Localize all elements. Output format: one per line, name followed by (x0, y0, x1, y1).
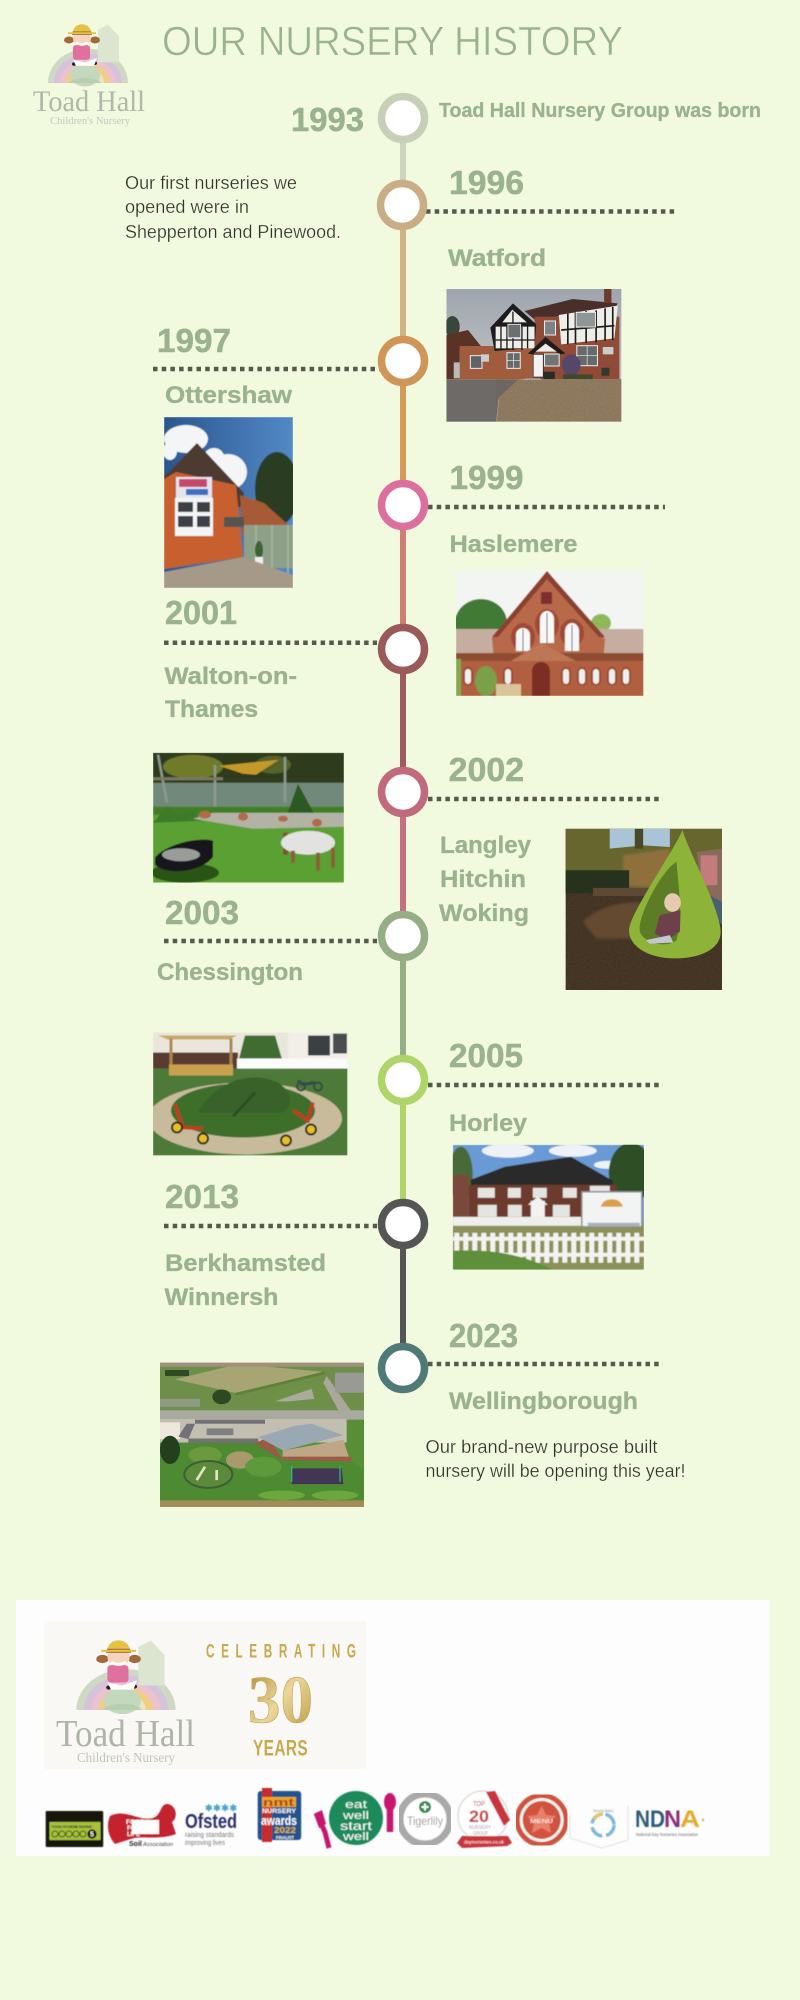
timeline spine (400, 118, 406, 1368)
photo: hanging pod (566, 828, 722, 990)
milestone 2002: Langley (440, 832, 532, 859)
badge: Ofsted: raising standards (185, 1832, 234, 1839)
badge: eat well start well: well (342, 1810, 369, 1822)
logo: Toad Hall small: Children's Nursery (50, 116, 131, 127)
milestone 2013: Berkhamsted (165, 1250, 326, 1277)
badge: nursery awards 2022: awards (261, 1813, 297, 1828)
badge: nursery awards 2022: nmt (263, 1797, 295, 1809)
badge: food for life: FOR (127, 1826, 140, 1832)
panel: celebrating 30 years banner (44, 1621, 366, 1769)
photo: Ottershaw (164, 417, 293, 588)
photo: mound and tricycles (153, 1032, 348, 1156)
text: first nurseries: opened were in (125, 197, 249, 217)
milestone 2001: Walton-on- (164, 663, 297, 690)
badge: eat well start well: well (342, 1831, 369, 1843)
badge: food for life: Association (142, 1842, 173, 1848)
badge: NDNA: A (680, 1806, 700, 1833)
badge: food for life: FOOD (126, 1819, 145, 1826)
text: first nurseries (125, 173, 341, 242)
text: first nurseries: Our first nurseries we (125, 173, 297, 193)
badge: NDNA: ND (635, 1806, 665, 1833)
photo: Horley (452, 1144, 644, 1270)
text: brand-new nursery (426, 1437, 686, 1481)
milestone 2003 (157, 894, 424, 986)
milestone 1999 (382, 459, 578, 558)
logo: Toad Hall small (33, 24, 145, 127)
badge: food hygiene rating: 5 (90, 1832, 94, 1838)
badge: Ofsted (185, 1803, 237, 1847)
badge: top 20 nursery group (457, 1791, 512, 1848)
panel: celebrating 30 years banner: YEARS (253, 1737, 308, 1761)
badge: food for life (108, 1804, 176, 1848)
text: brand-new nursery: nursery will be opening this year! (426, 1461, 686, 1481)
milestone 1997: 1997 (157, 322, 231, 359)
milestone 2023: Wellingborough (449, 1388, 638, 1415)
milestone 2013 (164, 1178, 424, 1311)
milestone 1997 (157, 322, 424, 409)
panel: footer white card (16, 1600, 770, 1856)
milestone 1996: Watford (448, 245, 546, 272)
photo: Haslemere (456, 571, 644, 696)
photo: play garden (153, 752, 344, 883)
milestone 2005: Horley (449, 1110, 528, 1137)
badge: NDNA (635, 1806, 704, 1837)
milestone 2003: Chessington (157, 959, 303, 986)
badge: shield award: Sensory Award (593, 1808, 613, 1813)
badge: nursery awards 2022: 2022 (274, 1826, 297, 1835)
badge: nursery awards 2022: FINALIST (276, 1835, 294, 1840)
milestone 2002: Woking (439, 900, 529, 927)
badge: Tigerlily (400, 1794, 450, 1844)
badge: top 20 nursery group: TOP (473, 1801, 485, 1808)
milestone 1996 (380, 164, 546, 272)
milestone 1993: Toad Hall Nursery Group was born (439, 100, 761, 122)
badge: eat well start well: start (340, 1819, 373, 1833)
milestone 2005: 2005 (449, 1037, 523, 1074)
panel: celebrating 30 years banner: 30 (248, 1662, 313, 1738)
milestone 2002: Hitchin (440, 866, 526, 893)
badge: food for life: Soil (129, 1841, 142, 1848)
badge: eat well start well (314, 1791, 396, 1848)
milestone 1999: Haslemere (450, 531, 578, 558)
milestone 2002 (382, 751, 532, 927)
badge: food hygiene rating: FOOD HYGIENE RATING (52, 1825, 92, 1829)
milestone 1993 (291, 96, 761, 140)
milestone 2003: 2003 (165, 894, 239, 931)
badge: shield award (570, 1806, 628, 1848)
milestone 2013: Winnersh (164, 1284, 278, 1311)
badge: food hygiene rating (46, 1811, 103, 1847)
photo: Watford house (446, 289, 622, 422)
panel: celebrating 30 years banner: CELEBRATING (206, 1642, 356, 1663)
badge: menu checked star: MENU (530, 1819, 554, 1825)
badge: Ofsted: Ofsted (185, 1811, 237, 1833)
text: first nurseries: Shepperton and Pinewood. (125, 222, 341, 242)
badge: top 20 nursery group: 20 (469, 1807, 489, 1826)
milestone 1993: 1993 (291, 101, 364, 138)
milestone 2005 (382, 1037, 528, 1137)
milestone 2023 (382, 1317, 638, 1415)
text: brand-new nursery: Our brand-new purpose built (426, 1437, 658, 1457)
dotted connectors (153, 212, 678, 1364)
milestone 2001: 2001 (165, 594, 237, 631)
milestone 1996: 1996 (449, 164, 524, 201)
title: OUR NURSERY HISTORY (162, 18, 623, 64)
badge: nursery awards 2022: NURSERY (262, 1808, 297, 1815)
milestone 2002: 2002 (449, 751, 524, 788)
badge: Ofsted: ✱✱✱✱ (205, 1803, 237, 1813)
badge: NDNA: N (664, 1806, 681, 1833)
panel: celebrating 30 years banner: Toad Hall (56, 1713, 195, 1755)
badge: eat well start well: eat (345, 1799, 367, 1811)
logo: Toad Hall small: Toad Hall (33, 85, 145, 118)
milestone 2023: 2023 (449, 1317, 518, 1354)
milestone 1997: Ottershaw (165, 382, 292, 409)
badge: Ofsted: improving lives (185, 1840, 225, 1847)
photo: Wellingborough aerial (160, 1362, 364, 1507)
badge: menu checked star (517, 1796, 566, 1844)
badge: NDNA: National Day Nurseries Association (636, 1832, 698, 1837)
badge: Tigerlily: Tigerlily (407, 1814, 443, 1828)
badge: top 20 nursery group: daynurseries.co.uk (464, 1840, 505, 1844)
panel: celebrating 30 years banner: Children's Nursery (77, 1751, 175, 1766)
badge: food for life: LIFE (127, 1832, 140, 1838)
milestone 1999: 1999 (450, 459, 524, 496)
badge: top 20 nursery group: NURSERY (469, 1825, 492, 1831)
milestone 2001 (164, 594, 424, 723)
badge: top 20 nursery group: GROUP (473, 1831, 489, 1837)
badge: nursery awards 2022 (258, 1788, 301, 1842)
milestone 2013: 2013 (165, 1178, 239, 1215)
milestone 2001: Thames (165, 696, 258, 723)
